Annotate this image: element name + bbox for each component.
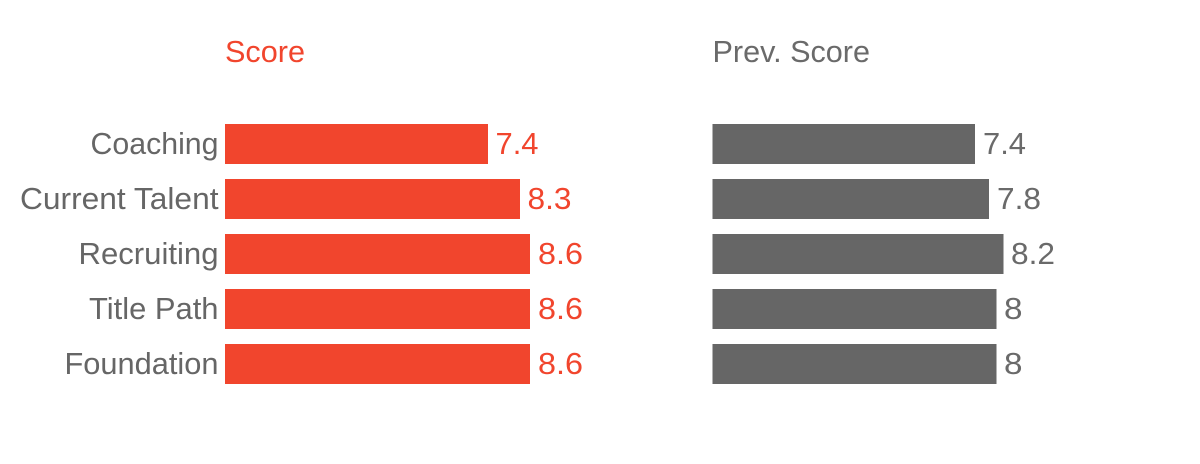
previous score values: 8 <box>1004 292 1022 326</box>
heading: Score: Score <box>225 35 305 69</box>
score values: 8.6 <box>538 237 583 271</box>
previous score values: 7.4 <box>983 127 1026 161</box>
score values <box>496 127 583 381</box>
row labels: Recruiting <box>78 237 218 271</box>
previous score values: 8.2 <box>1011 237 1055 271</box>
row labels <box>20 127 219 381</box>
score values: 8.6 <box>538 292 583 326</box>
previous score values: 7.8 <box>997 182 1041 216</box>
previous score bars <box>712 124 1004 384</box>
row labels: Foundation <box>64 347 218 381</box>
score values: 7.4 <box>496 127 539 161</box>
score values: 8.6 <box>538 347 583 381</box>
score values: 8.3 <box>528 182 572 216</box>
row labels: Current Talent <box>20 182 219 216</box>
row labels: Coaching <box>90 127 218 161</box>
score bars <box>225 124 530 384</box>
heading: Prev. Score: Prev. Score <box>712 35 870 69</box>
row labels: Title Path <box>89 292 218 326</box>
previous score values <box>983 127 1055 381</box>
previous score values: 8 <box>1004 347 1022 381</box>
